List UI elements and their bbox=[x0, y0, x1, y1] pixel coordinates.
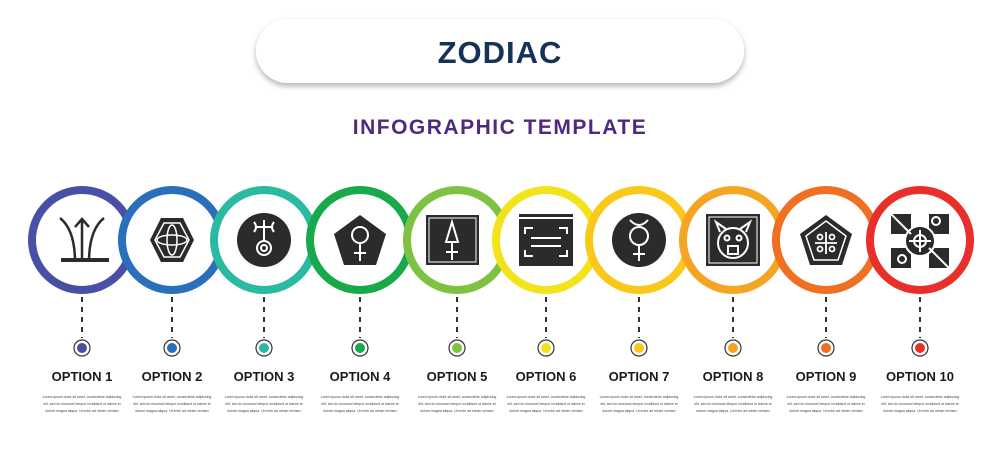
description texts: Lorem ipsum dolor sit amet, consectetur adipiscing bbox=[600, 395, 678, 399]
description texts: dolore magna aliqua. Ut enim ad minim veniam bbox=[227, 409, 301, 413]
icon 8: pig bbox=[706, 214, 760, 266]
title pill bbox=[256, 19, 744, 83]
description texts: dolore magna aliqua. Ut enim ad minim veniam bbox=[602, 409, 676, 413]
option labels: OPTION 7 bbox=[609, 369, 669, 384]
icon 7: mercury bbox=[612, 213, 666, 267]
description texts: dolore magna aliqua. Ut enim ad minim veniam bbox=[789, 409, 863, 413]
description texts: elit, sed do eiusmod tempor incididunt ut labore et bbox=[225, 402, 303, 406]
description texts: elit, sed do eiusmod tempor incididunt ut labore et bbox=[321, 402, 399, 406]
description texts: elit, sed do eiusmod tempor incididunt ut labore et bbox=[881, 402, 959, 406]
option labels: OPTION 2 bbox=[142, 369, 202, 384]
description texts bbox=[43, 395, 959, 413]
icon 1: arrows bbox=[60, 218, 109, 262]
description texts: Lorem ipsum dolor sit amet, consectetur adipiscing bbox=[881, 395, 959, 399]
option labels: OPTION 3 bbox=[234, 369, 294, 384]
description texts: dolore magna aliqua. Ut enim ad minim veniam bbox=[45, 409, 119, 413]
icon 2: hexagon bbox=[150, 218, 194, 262]
description texts: dolore magna aliqua. Ut enim ad minim veniam bbox=[696, 409, 770, 413]
description texts: dolore magna aliqua. Ut enim ad minim veniam bbox=[509, 409, 583, 413]
option labels bbox=[52, 369, 954, 384]
icon 9: pentagon bbox=[800, 215, 852, 265]
description texts: dolore magna aliqua. Ut enim ad minim veniam bbox=[883, 409, 957, 413]
icon 6: frame bbox=[519, 214, 573, 266]
option labels: OPTION 4 bbox=[330, 369, 391, 384]
option labels: OPTION 1 bbox=[52, 369, 112, 384]
description texts: elit, sed do eiusmod tempor incididunt ut labore et bbox=[43, 402, 121, 406]
option labels: OPTION 8 bbox=[703, 369, 763, 384]
description texts: elit, sed do eiusmod tempor incididunt ut labore et bbox=[133, 402, 211, 406]
icon 5: square bbox=[426, 215, 479, 265]
description texts: Lorem ipsum dolor sit amet, consectetur adipiscing bbox=[418, 395, 496, 399]
option labels: OPTION 9 bbox=[796, 369, 856, 384]
option labels: OPTION 5 bbox=[427, 369, 487, 384]
description texts: elit, sed do eiusmod tempor incididunt ut labore et bbox=[694, 402, 772, 406]
description texts: Lorem ipsum dolor sit amet, consectetur adipiscing bbox=[43, 395, 121, 399]
description texts: elit, sed do eiusmod tempor incididunt ut labore et bbox=[507, 402, 585, 406]
connectors and dots bbox=[82, 297, 920, 338]
description texts: elit, sed do eiusmod tempor incididunt ut labore et bbox=[600, 402, 678, 406]
description texts: dolore magna aliqua. Ut enim ad minim veniam bbox=[323, 409, 397, 413]
title: ZODIAC bbox=[438, 35, 562, 70]
subtitle: INFOGRAPHIC TEMPLATE bbox=[353, 116, 647, 139]
description texts: Lorem ipsum dolor sit amet, consectetur adipiscing bbox=[507, 395, 585, 399]
icon 4: venus pentagon bbox=[334, 215, 386, 265]
option labels: OPTION 10 bbox=[886, 369, 954, 384]
description texts: Lorem ipsum dolor sit amet, consectetur adipiscing bbox=[787, 395, 865, 399]
rings bbox=[32, 190, 970, 290]
description texts: dolore magna aliqua. Ut enim ad minim veniam bbox=[135, 409, 209, 413]
description texts: elit, sed do eiusmod tempor incididunt ut labore et bbox=[418, 402, 496, 406]
description texts: elit, sed do eiusmod tempor incididunt ut labore et bbox=[787, 402, 865, 406]
description texts: dolore magna aliqua. Ut enim ad minim veniam bbox=[420, 409, 494, 413]
description texts: Lorem ipsum dolor sit amet, consectetur adipiscing bbox=[133, 395, 211, 399]
description texts: Lorem ipsum dolor sit amet, consectetur adipiscing bbox=[694, 395, 772, 399]
option labels: OPTION 6 bbox=[516, 369, 576, 384]
description texts: Lorem ipsum dolor sit amet, consectetur adipiscing bbox=[225, 395, 303, 399]
icon 3: uranus bbox=[237, 213, 291, 267]
description texts: Lorem ipsum dolor sit amet, consectetur adipiscing bbox=[321, 395, 399, 399]
icon 10: target bbox=[891, 214, 949, 268]
